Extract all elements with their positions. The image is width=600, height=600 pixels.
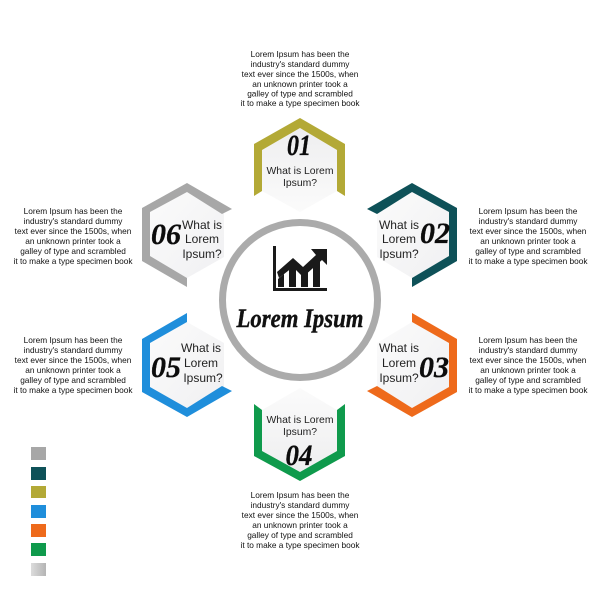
text block: top: an unknown printer took a <box>252 79 348 89</box>
hexagon 05 <box>142 313 232 417</box>
hexagon 05: What is <box>181 341 221 355</box>
hexagon 06: 06 <box>151 218 181 251</box>
text block: left lower: galley of type and scrambled <box>20 375 126 385</box>
hexagon 05: Lorem <box>184 356 218 370</box>
text block: left lower: industry's standard dummy <box>24 345 123 355</box>
hexagon 04: Ipsum? <box>283 427 317 438</box>
hexagon 04: What is Lorem <box>267 415 333 426</box>
text block: right upper: text ever since the 1500s, when <box>470 226 587 236</box>
hexagon 01 <box>254 118 345 212</box>
colour swatches <box>31 447 46 576</box>
text block: right upper: Lorem Ipsum has been the <box>479 206 578 216</box>
text block: right upper <box>469 206 588 266</box>
hexagon 03 <box>367 313 457 417</box>
hexagon 03: What is <box>379 341 419 355</box>
hexagon 06 <box>142 183 232 287</box>
text block: left upper: it to make a type specimen book <box>14 256 133 266</box>
text block: bottom: industry's standard dummy <box>251 500 350 510</box>
text block: bottom <box>241 490 360 550</box>
text block: right upper: galley of type and scrambled <box>475 246 581 256</box>
text block: right upper: it to make a type specimen book <box>469 256 588 266</box>
hexagon 01: Ipsum? <box>283 178 317 189</box>
text block: left upper: Lorem Ipsum has been the <box>24 206 123 216</box>
text block: bottom: Lorem Ipsum has been the <box>251 490 350 500</box>
text block: left lower <box>14 335 133 395</box>
hexagon 04 <box>254 388 345 481</box>
hexagon 02: What is <box>379 218 419 232</box>
text block: left upper: galley of type and scrambled <box>20 246 126 256</box>
hexagon 01: 01 <box>287 129 311 162</box>
icon: growth chart <box>273 246 327 291</box>
text block: top: Lorem Ipsum has been the <box>251 49 350 59</box>
hexagon 04: 04 <box>286 439 312 472</box>
hexagon 05: Ipsum? <box>183 371 223 385</box>
text block: bottom: an unknown printer took a <box>252 520 348 530</box>
hexagon 05: 05 <box>151 351 181 384</box>
text block: top: industry's standard dummy <box>251 59 350 69</box>
hexagon 03: Ipsum? <box>379 371 419 385</box>
text block: left upper: an unknown printer took a <box>25 236 121 246</box>
text block: right lower: text ever since the 1500s, when <box>470 355 587 365</box>
hexagon 01: What is Lorem <box>267 166 333 177</box>
text block: top: it to make a type specimen book <box>241 98 360 108</box>
center circle <box>222 222 378 378</box>
hexagon 03: Lorem <box>382 356 416 370</box>
hexagon 06: What is <box>182 218 222 232</box>
text block: left upper: industry's standard dummy <box>24 216 123 226</box>
text block: left lower: it to make a type specimen book <box>14 385 133 395</box>
hexagon 02: Ipsum? <box>379 247 419 261</box>
hexagon 02: 02 <box>420 217 450 250</box>
hexagon 02 <box>367 183 457 287</box>
text block: right lower: galley of type and scrambled <box>475 375 581 385</box>
hexagon 06: Ipsum? <box>182 247 222 261</box>
text block: left upper <box>14 206 133 266</box>
text block: left lower: Lorem Ipsum has been the <box>24 335 123 345</box>
center title: Lorem Ipsum <box>236 304 364 333</box>
text block: right lower: it to make a type specimen book <box>469 385 588 395</box>
text block: top <box>241 49 360 108</box>
hexagon 02: Lorem <box>382 232 416 246</box>
text block: right upper: industry's standard dummy <box>479 216 578 226</box>
text block: top: text ever since the 1500s, when <box>242 69 359 79</box>
text block: left lower: an unknown printer took a <box>25 365 121 375</box>
text block: right lower: industry's standard dummy <box>479 345 578 355</box>
hexagon 06: Lorem <box>185 232 219 246</box>
text block: left lower: text ever since the 1500s, when <box>15 355 132 365</box>
text block: right upper: an unknown printer took a <box>480 236 576 246</box>
text block: top: galley of type and scrambled <box>247 88 353 98</box>
text block: left upper: text ever since the 1500s, when <box>15 226 132 236</box>
hexagon 03: 03 <box>419 351 449 384</box>
text block: right lower <box>469 335 588 395</box>
text block: bottom: galley of type and scrambled <box>247 530 353 540</box>
text block: right lower: an unknown printer took a <box>480 365 576 375</box>
text block: right lower: Lorem Ipsum has been the <box>479 335 578 345</box>
text block: bottom: text ever since the 1500s, when <box>242 510 359 520</box>
text block: bottom: it to make a type specimen book <box>241 540 360 550</box>
